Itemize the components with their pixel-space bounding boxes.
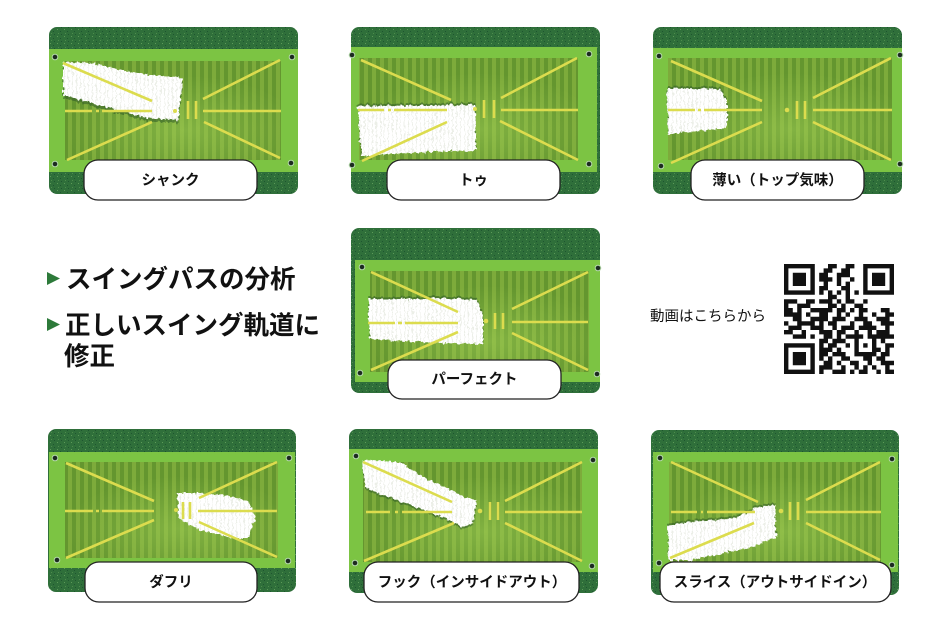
QR code — [784, 264, 894, 374]
panel: スライス（アウトサイドイン） — [651, 430, 899, 602]
heading: 正しいスイング軌道に修正 — [47, 311, 320, 371]
panel: パーフェクト: パーフェクト — [431, 371, 518, 388]
panel: ダフリ — [48, 429, 296, 602]
panel: トゥ — [349, 27, 600, 200]
panel: 薄い（トップ気味） — [653, 27, 903, 200]
heading: 正しいスイング軌道に修正: 正しいスイング軌道に — [65, 311, 320, 340]
heading: スイングパスの分析: スイングパスの分析 — [66, 265, 296, 294]
panel: トゥ: トゥ — [459, 173, 488, 189]
panel: フック（インサイドアウト）: フック（インサイドアウト） — [378, 574, 566, 591]
panel: シャンク: シャンク — [142, 172, 200, 189]
panel: 薄い（トップ気味）: 薄い（トップ気味） — [712, 171, 843, 189]
panel: フック（インサイドアウト） — [349, 429, 598, 602]
panel: ダフリ: ダフリ — [149, 573, 193, 591]
heading: 正しいスイング軌道に修正: 修正 — [64, 343, 115, 371]
panel: シャンク — [49, 27, 298, 200]
panel: スライス（アウトサイドイン）: スライス（アウトサイドイン） — [674, 574, 876, 591]
caption: 動画はこちらから: 動画はこちらから — [650, 308, 766, 325]
panel: パーフェクト — [351, 228, 601, 399]
